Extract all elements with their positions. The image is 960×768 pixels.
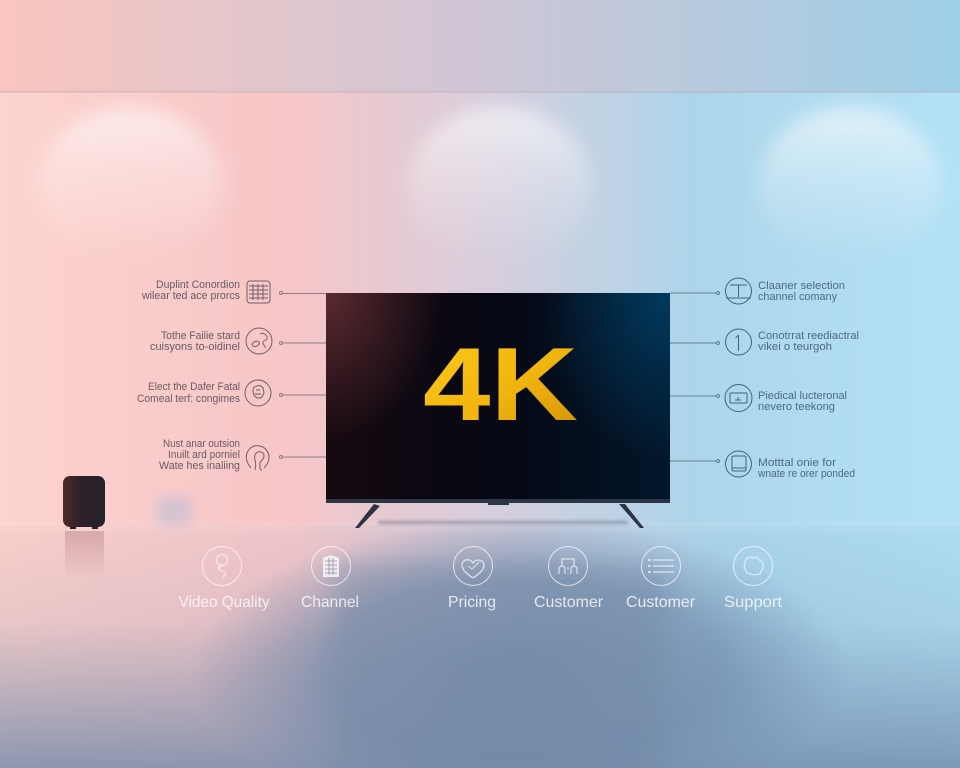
- callout: right 2: [670, 329, 859, 355]
- callout: right 4: [670, 451, 855, 480]
- callout: left 4: [159, 438, 326, 472]
- speaker shadow glow: [157, 497, 191, 525]
- callout: right 4: wnate re orer ponded: [757, 468, 855, 480]
- category: pricing: Pricing: [448, 594, 496, 611]
- callout: right 1: [670, 278, 845, 304]
- category: video quality: [178, 546, 270, 611]
- ceiling line: [0, 91, 960, 93]
- category: customer 1: [534, 546, 604, 611]
- category: pricing: [448, 546, 496, 611]
- category: video quality: Video Quality: [178, 594, 270, 611]
- TV shadow: [378, 521, 628, 524]
- callout: left 1: Duplint Conordion: [156, 279, 240, 291]
- callout: left 4: Nust anar outsion: [163, 438, 240, 450]
- bottom categories: [178, 546, 783, 611]
- callout: left 4: Wate hes inaliing: [159, 460, 240, 472]
- callout: left 1: wilear ted ace prorcs: [141, 290, 240, 302]
- category: customer 2: [626, 546, 696, 611]
- TV bezel: [326, 499, 670, 503]
- callout: left 3: Elect the Dafer Fatal: [148, 381, 240, 393]
- spotlights: [38, 107, 942, 263]
- callout: right 1: channel comany: [758, 291, 837, 303]
- callout: right 3: Piedical lucteronal: [758, 390, 847, 402]
- callout: right 1: Claaner selection: [758, 280, 845, 292]
- callout: right 2: vikei o teurgoh: [758, 341, 832, 353]
- speaker reflection: [65, 531, 104, 579]
- callout: left 3: Comeal terf: congimes: [137, 393, 240, 405]
- TV screen: [326, 293, 670, 500]
- callout: right 3: nevero teekong: [758, 401, 835, 413]
- callout: left 4: Inuilt ard porniel: [168, 449, 240, 461]
- callout: left 2: cuisyons to-oidinel: [150, 341, 240, 353]
- callout: left 1: [141, 279, 326, 303]
- category: channel: Channel: [301, 594, 359, 611]
- ceiling band: [0, 0, 960, 92]
- category: support: [724, 546, 783, 611]
- callout: left 3: [137, 380, 326, 406]
- TV: [326, 293, 670, 528]
- callout: left 2: Tothe Failie stard: [161, 330, 240, 342]
- callout: left 2: [150, 328, 326, 354]
- callout: right 4: Motttal onie for: [758, 457, 836, 469]
- right callouts: [670, 278, 859, 480]
- speaker: [63, 476, 105, 529]
- floor: [0, 522, 960, 768]
- left callouts: [137, 279, 326, 472]
- category: customer 1: Customer: [534, 594, 604, 611]
- TV stand: [355, 504, 644, 528]
- callout: right 2: Conotrrat reediactral: [758, 330, 859, 342]
- category: channel: [301, 546, 359, 611]
- callout: right 3: [670, 384, 847, 413]
- category: customer 2: Customer: [626, 594, 696, 611]
- 4K logo: 4K: [423, 327, 578, 443]
- category: support: Support: [724, 594, 783, 611]
- background wall: [0, 92, 960, 532]
